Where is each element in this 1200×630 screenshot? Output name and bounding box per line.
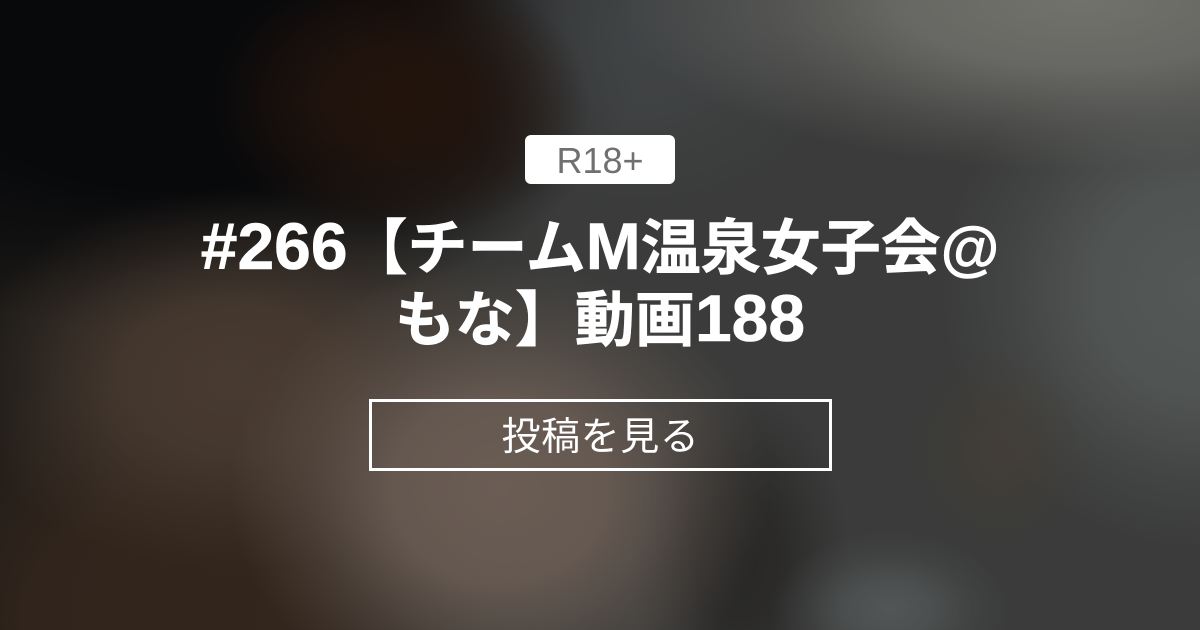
title: #266【チームM温泉女子会@: [201, 209, 999, 283]
button: view post: [369, 399, 832, 471]
badge: R18+: R18+: [556, 140, 644, 181]
badge: R18+: [525, 135, 675, 184]
title: もな】動画188: [395, 281, 805, 355]
title: [201, 209, 999, 355]
button: view post: 投稿を見る: [501, 416, 700, 459]
